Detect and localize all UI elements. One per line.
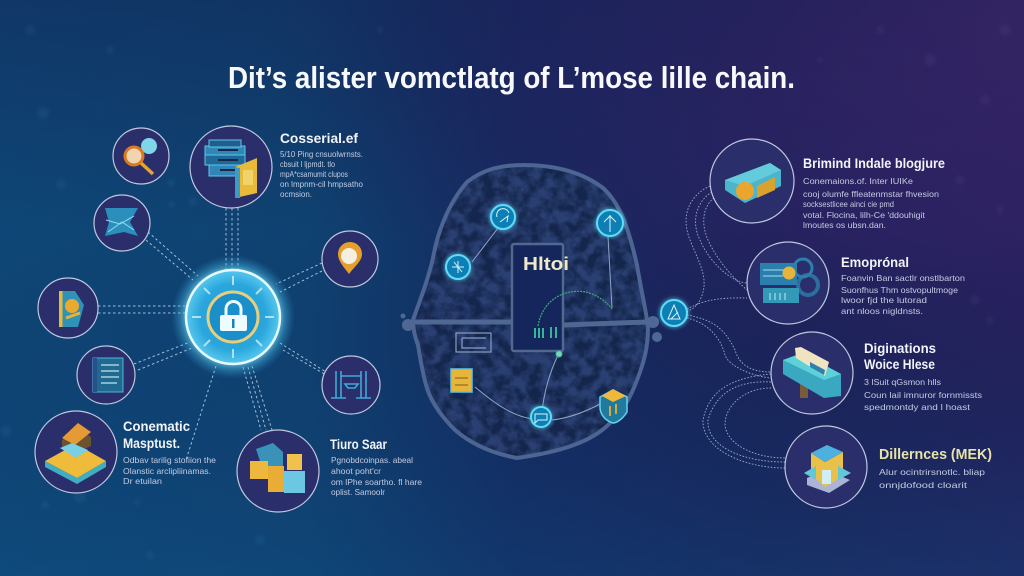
text: Conematic: Masptust.: [123, 436, 180, 451]
text: Conematic: Olanstic arclipliinamas.: [123, 466, 211, 476]
text: Diginations: spedmontdy and l hoast: [864, 402, 971, 412]
text: Brimind: socksestlicee ainci cie pmd: [803, 199, 894, 209]
icon: gate: [331, 371, 371, 398]
node: data files: [190, 126, 272, 208]
text: Brimind: Conemaions.of. Inter IUIKe: [803, 176, 913, 186]
node: location pin: [322, 231, 378, 287]
icon: outline tray: [456, 333, 491, 352]
node: top left: [491, 205, 515, 229]
node: left book: [38, 278, 98, 338]
icon: book: [59, 291, 84, 327]
left dashed connectors: [98, 208, 328, 460]
node: envelope: [94, 195, 150, 251]
text: Dillernces (MEK): onnjdofood cloarit: [879, 480, 968, 490]
icon: document: [93, 358, 123, 392]
text: Emoprónal: lwoor fjd the lutorad: [841, 295, 927, 305]
text: Cosserial: on lmpnm-cil hmpsatho: [280, 179, 363, 189]
text: Brimind: lmoutes os ubsn.dan.: [803, 220, 886, 230]
node: device block: [771, 332, 853, 414]
text: Tiuro Saar: [330, 437, 422, 497]
icon: cubes: [250, 443, 305, 493]
central shield diagram: [400, 160, 687, 465]
text: Diginations: [864, 341, 982, 412]
text: Brimind: votal. Flocina, lilh-Ce 'ddouhigit: [803, 210, 926, 220]
shield body: [400, 160, 662, 465]
text: Diginations: Woice Hlese: [864, 357, 935, 372]
text: Tiuro Saar: oplist. Samoolr: [331, 487, 385, 497]
node: right hub: [661, 300, 687, 326]
text: Cosserial: 5/10 Ping cnsuolwrnsts.: [280, 149, 363, 159]
text: Tiuro Saar: Pgnobdcoinpas. abeal: [331, 455, 413, 465]
text: Diginations: 3 lSuit qGsmon hlls: [864, 377, 941, 387]
text: Conematic: Conematic: [123, 419, 190, 434]
node: dashboard: [747, 242, 829, 324]
right dashed connectors: [686, 186, 785, 468]
connector lines: [472, 228, 612, 420]
text: Conematic: [123, 419, 216, 486]
central panel: [512, 244, 612, 351]
text: Tiuro Saar: om lPhe soartho. fl hare: [331, 477, 422, 487]
node: chat: [531, 407, 551, 427]
node: gate: [322, 356, 380, 414]
node: right building: [710, 139, 794, 223]
text: Dillernces (MEK): [879, 446, 992, 490]
icon: lock: [220, 302, 247, 331]
text: Emoprónal: Foanvin Ban sactlr onstlbarton: [841, 273, 965, 283]
icon: building block: [725, 163, 781, 203]
icon: isometric tower: [804, 445, 851, 493]
node: tower: [785, 426, 867, 508]
text: Emoprónal: Emoprónal: [841, 255, 909, 270]
node: cinematic platform: [35, 411, 117, 493]
text: Tiuro Saar: Tiuro Saar: [330, 437, 388, 452]
text: Emoprónal: ant nloos nigldnsts.: [841, 306, 923, 316]
node: left: [446, 255, 470, 279]
text: Cosserial: Cosserial.ef: [280, 131, 359, 146]
text: Diginations: Diginations: [864, 341, 936, 356]
text: Brimind: [803, 156, 945, 230]
text: Tiuro Saar: ahoot poht'cr: [331, 466, 381, 476]
text: Brimind: Brimind Indale blogjure: [803, 156, 945, 171]
icon: gold card: [451, 369, 472, 392]
node: document: [77, 346, 135, 404]
panel label: Hltoi: [523, 254, 569, 274]
node: small green: [556, 351, 562, 357]
icon: magnifier: [125, 138, 157, 174]
icon: isometric platform: [45, 423, 106, 484]
icon: pin: [338, 242, 362, 274]
text: Brimind: cooj olumfe ffleatenmstar fhvesion: [803, 189, 939, 199]
text: Emoprónal: [841, 255, 965, 316]
text: Conematic: Dr etuilan: [123, 476, 162, 486]
text: Emoprónal: Suonfhus Thm ostvopultmoge: [841, 285, 958, 295]
node: top right: [597, 210, 623, 236]
text: Cosserial: [280, 131, 363, 199]
text: Dillernces (MEK): Dillernces (MEK): [879, 446, 992, 463]
node: magnifier: [113, 128, 169, 184]
text: Cosserial: ocmsion.: [280, 189, 312, 199]
icon: gold cube node: [600, 389, 627, 423]
text: Cosserial: cbsuit l ljpmdt. tlo: [280, 159, 335, 169]
text: Diginations: Coun lail imnuror fornmissts: [864, 390, 982, 400]
icon: device block: [783, 347, 841, 398]
title: Dit’s alister vomctlatg of L’mose lille chain.: [228, 60, 795, 95]
icon: data stack: [205, 140, 257, 198]
node: boxes: [237, 430, 319, 512]
text: Conematic: Odbav tarilig stofiion the: [123, 455, 216, 465]
icon: dashboard: [760, 259, 818, 303]
text: Dillernces (MEK): Alur ocintrirsnotlc. bliap: [879, 467, 985, 477]
icon: envelope: [105, 208, 138, 236]
text: Cosserial: mpA*csamumit clupos: [280, 169, 348, 179]
hub: padlock: [171, 255, 295, 379]
